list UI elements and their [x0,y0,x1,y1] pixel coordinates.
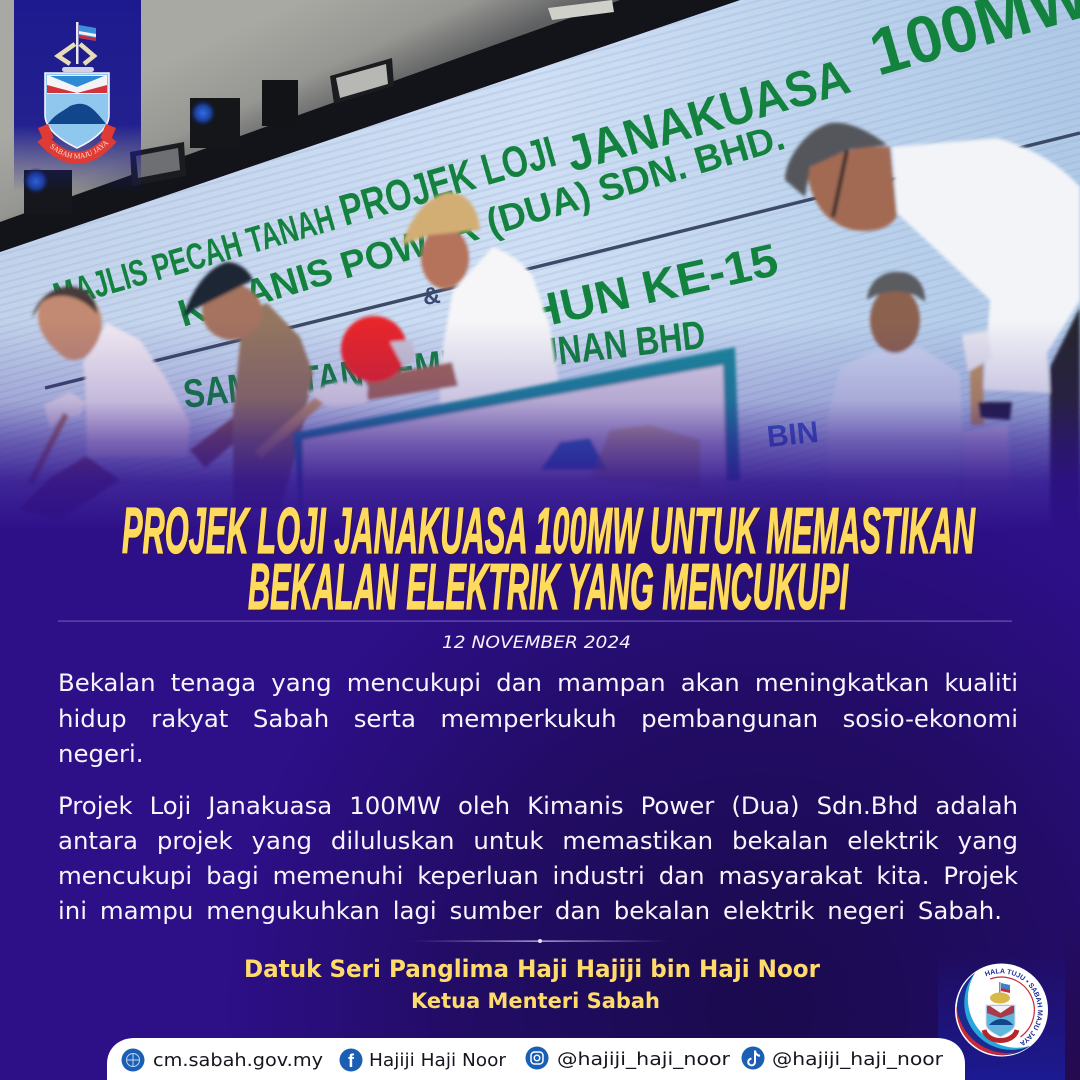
signatory: Ketua Menteri Sabah [411,989,660,1013]
photo: groundbreaking ceremony [0,0,1080,532]
social bar [107,1038,965,1080]
small crest [984,982,1017,1040]
header band with Sabah crest [14,0,141,188]
man in brown shirt, cap [183,262,313,510]
icon: facebook: f [348,1051,355,1071]
screen text: TAHUN KE-15 [461,233,783,353]
LED screen [0,0,1080,530]
motto ribbon: SABAH MAJU JAYA [50,141,109,158]
shield [45,73,109,148]
screen text: JANAKUASA [560,48,856,183]
facebook label: Hajiji Haji Noor [369,1051,507,1071]
title [122,494,976,623]
motto ribbon [38,124,116,164]
date: 12 NOVEMBER 2024 [442,633,631,653]
screen text: KIMANIS POWER (DUA) SDN. BHD. [174,116,790,336]
signatory [244,955,820,1013]
lower panel background [0,470,1080,1080]
screen text: BIN [765,416,820,454]
purple fade over photo [0,320,1080,532]
body text: negeri. [58,739,144,768]
round badge logo: HALA TUJU • SABAH MAJU JAYA [984,968,1043,1046]
man in blue shirt, right [827,272,963,510]
screen text: PROJEK LOJI [334,127,561,236]
icon: instagram [526,1046,548,1070]
signboard [293,347,740,510]
body text: ini mampu mengukuhkan lagi sumber dan bekalan elektrik negeri Sabah. [58,896,1002,925]
man in white shirt, left [18,286,190,520]
icon: web [122,1048,144,1072]
man bowing, right [785,123,1080,530]
instagram label: @hajiji_haji_noor [557,1049,731,1070]
body text: hidup rakyat Sabah serta memperkukuh pembangunan sosio-ekonomi [58,704,1018,733]
man in cream cap, red ribbon [258,192,560,455]
body text: antara projek yang diluluskan untuk memastikan bekalan elektrik yang [58,826,1018,855]
screen text: MAJLIS PECAH TANAH [49,197,339,317]
screen text: & [421,282,442,311]
website label: cm.sabah.gov.my [153,1050,323,1071]
signatory: Datuk Seri Panglima Haji Hajiji bin Haji Noor [244,955,820,983]
icon: tiktok [742,1046,764,1070]
stage lights [23,0,614,214]
screen text: SAMBUTAN PEMBANGUNAN BHD [181,313,708,417]
tiktok label: @hajiji_haji_noor [772,1049,944,1070]
body text: mencukupi bagi memenuhi keperluan industri dan masyarakat kita. Projek [58,861,1018,890]
icon: facebook [340,1048,362,1072]
screen text [49,0,1080,454]
body text: Projek Loji Janakuasa 100MW oleh Kimanis Power (Dua) Sdn.Bhd adalah [58,791,1018,820]
tent roof [0,0,640,230]
black truss band [0,0,740,252]
round badge logo [955,964,1048,1056]
flag and raised arms [58,22,96,72]
body text: Bekalan tenaga yang mencukupi dan mampan akan meningkatkan kualiti [58,668,1018,697]
